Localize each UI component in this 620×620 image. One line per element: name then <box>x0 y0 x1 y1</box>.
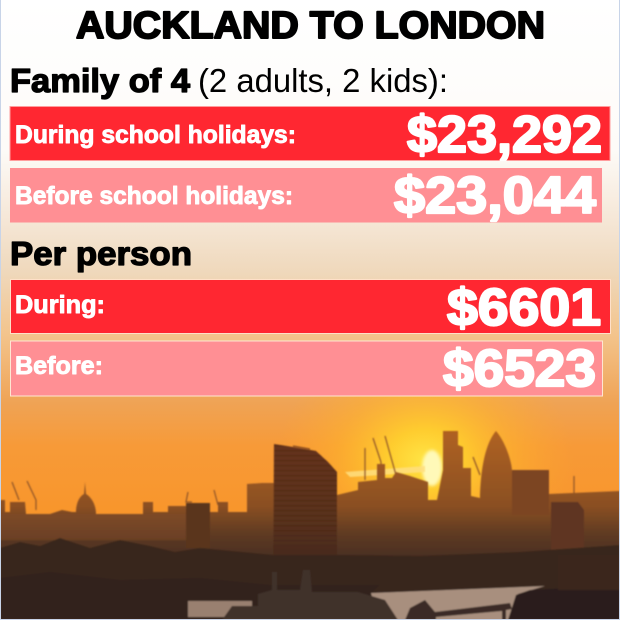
dark foreground with trees <box>0 538 620 620</box>
bar: before school holidays: $23,044 <box>394 167 596 225</box>
heading: family of 4: (2 adults, 2 kids): <box>198 62 448 99</box>
bar: before, per person: Before: <box>15 352 103 380</box>
bar: during, per person <box>10 279 610 337</box>
small boat and bridge <box>405 600 512 620</box>
block beside gherkin <box>512 470 549 515</box>
bar: during school holidays: $23,292 <box>407 106 602 164</box>
bar: during, per person: $6601 <box>447 279 601 337</box>
bar: before school holidays <box>10 167 602 225</box>
near-left building <box>186 503 210 548</box>
bar: during, per person: During: <box>15 291 105 319</box>
hazy mid city <box>0 514 186 540</box>
cranes <box>12 436 574 510</box>
tall tower <box>273 444 337 600</box>
heading: family of 4 <box>10 62 448 99</box>
heading: per person: Per person <box>10 235 192 272</box>
right bank <box>508 585 620 620</box>
bar: during school holidays: During school holidays: <box>15 121 296 149</box>
bar: before, per person: $6523 <box>443 340 596 398</box>
bar: during school holidays <box>10 106 610 164</box>
sun <box>422 450 442 486</box>
right mid block <box>551 502 584 550</box>
bar: before, per person <box>10 340 602 398</box>
ships <box>222 570 398 620</box>
heading: family of 4: Family of 4 <box>10 62 191 99</box>
water <box>371 586 545 620</box>
distant skyline left and centre <box>0 431 620 620</box>
title: AUCKLAND TO LONDON <box>76 5 545 47</box>
bar: before school holidays: Before school holidays: <box>15 182 293 210</box>
